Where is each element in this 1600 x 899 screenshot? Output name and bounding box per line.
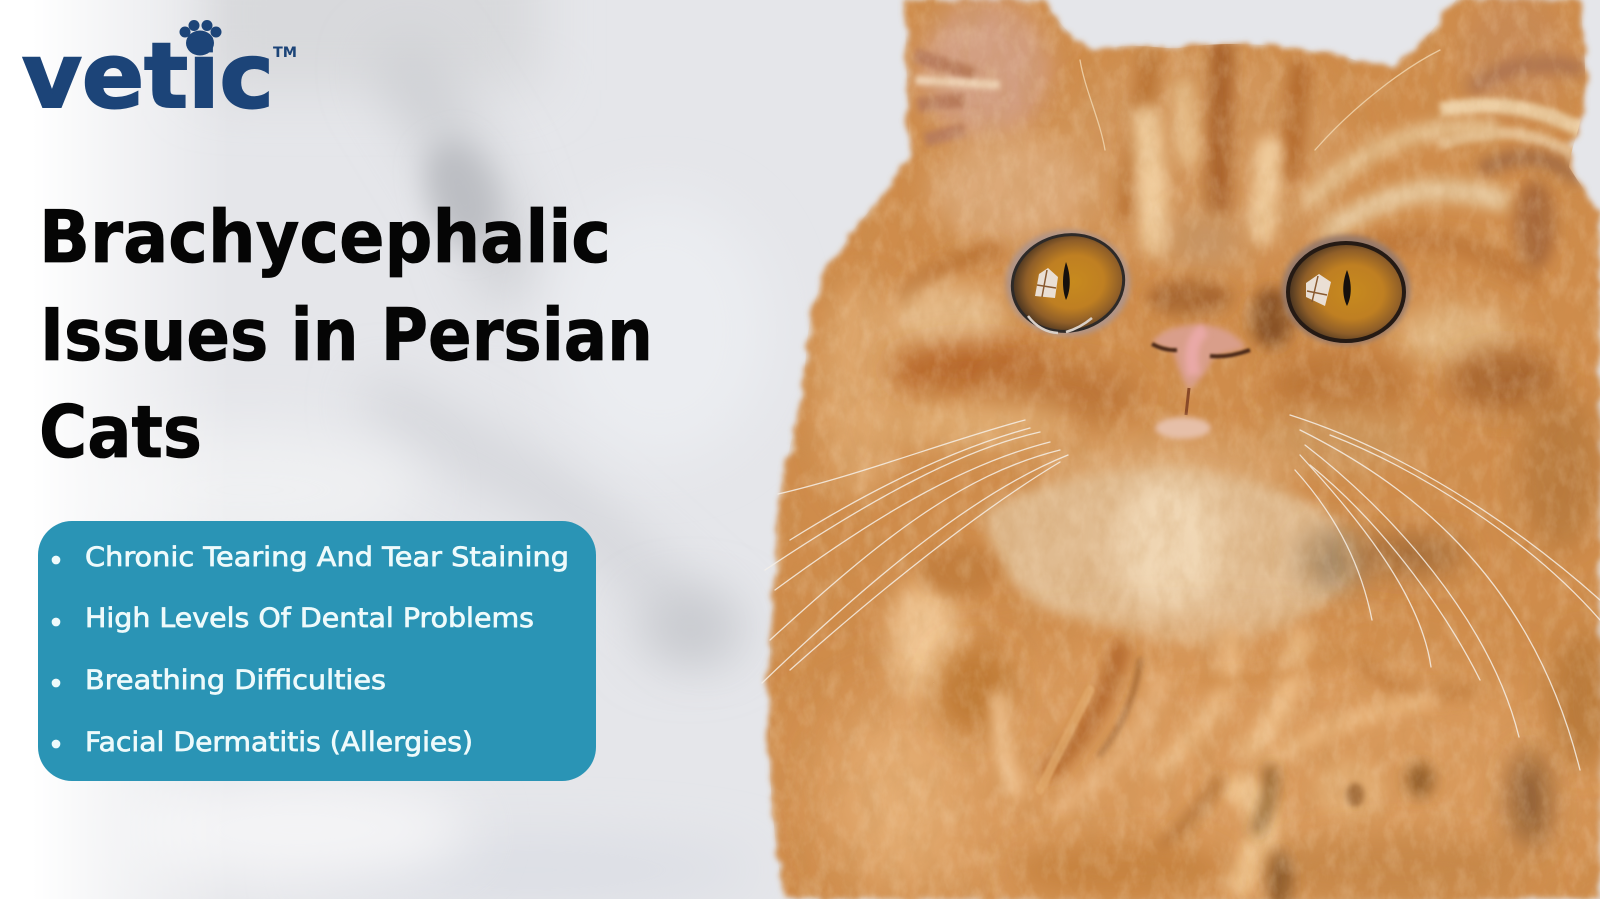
cat shading and markings [770,0,1600,899]
list items: Chronic Tearing And Tear Staining [85,542,569,573]
nose and mouth [1152,324,1250,439]
list items [52,542,569,758]
chest fur [790,545,1600,899]
title: Cats [39,390,202,474]
cheeks [818,250,1600,550]
logo: vetic: vetic [22,24,274,129]
logo paw [180,20,222,56]
cat: ginger Persian portrait [762,0,1600,899]
forehead stripes [930,50,1555,280]
title: Issues in Persian [40,293,653,377]
whiskers [762,50,1600,770]
list items: High Levels Of Dental Problems [85,603,534,634]
panel: issues list [38,521,596,781]
cat fur silhouette [767,0,1600,899]
list items: Facial Dermatitis (Allergies) [85,727,473,758]
right eye [1282,235,1410,345]
ears [915,0,1590,180]
logo: vetic: TM [273,45,297,61]
title [39,195,653,474]
title: Brachycephalic [39,195,611,279]
chin and chest bib [985,435,1465,648]
left eye [1003,224,1133,342]
list items: Breathing Difficulties [85,665,386,696]
